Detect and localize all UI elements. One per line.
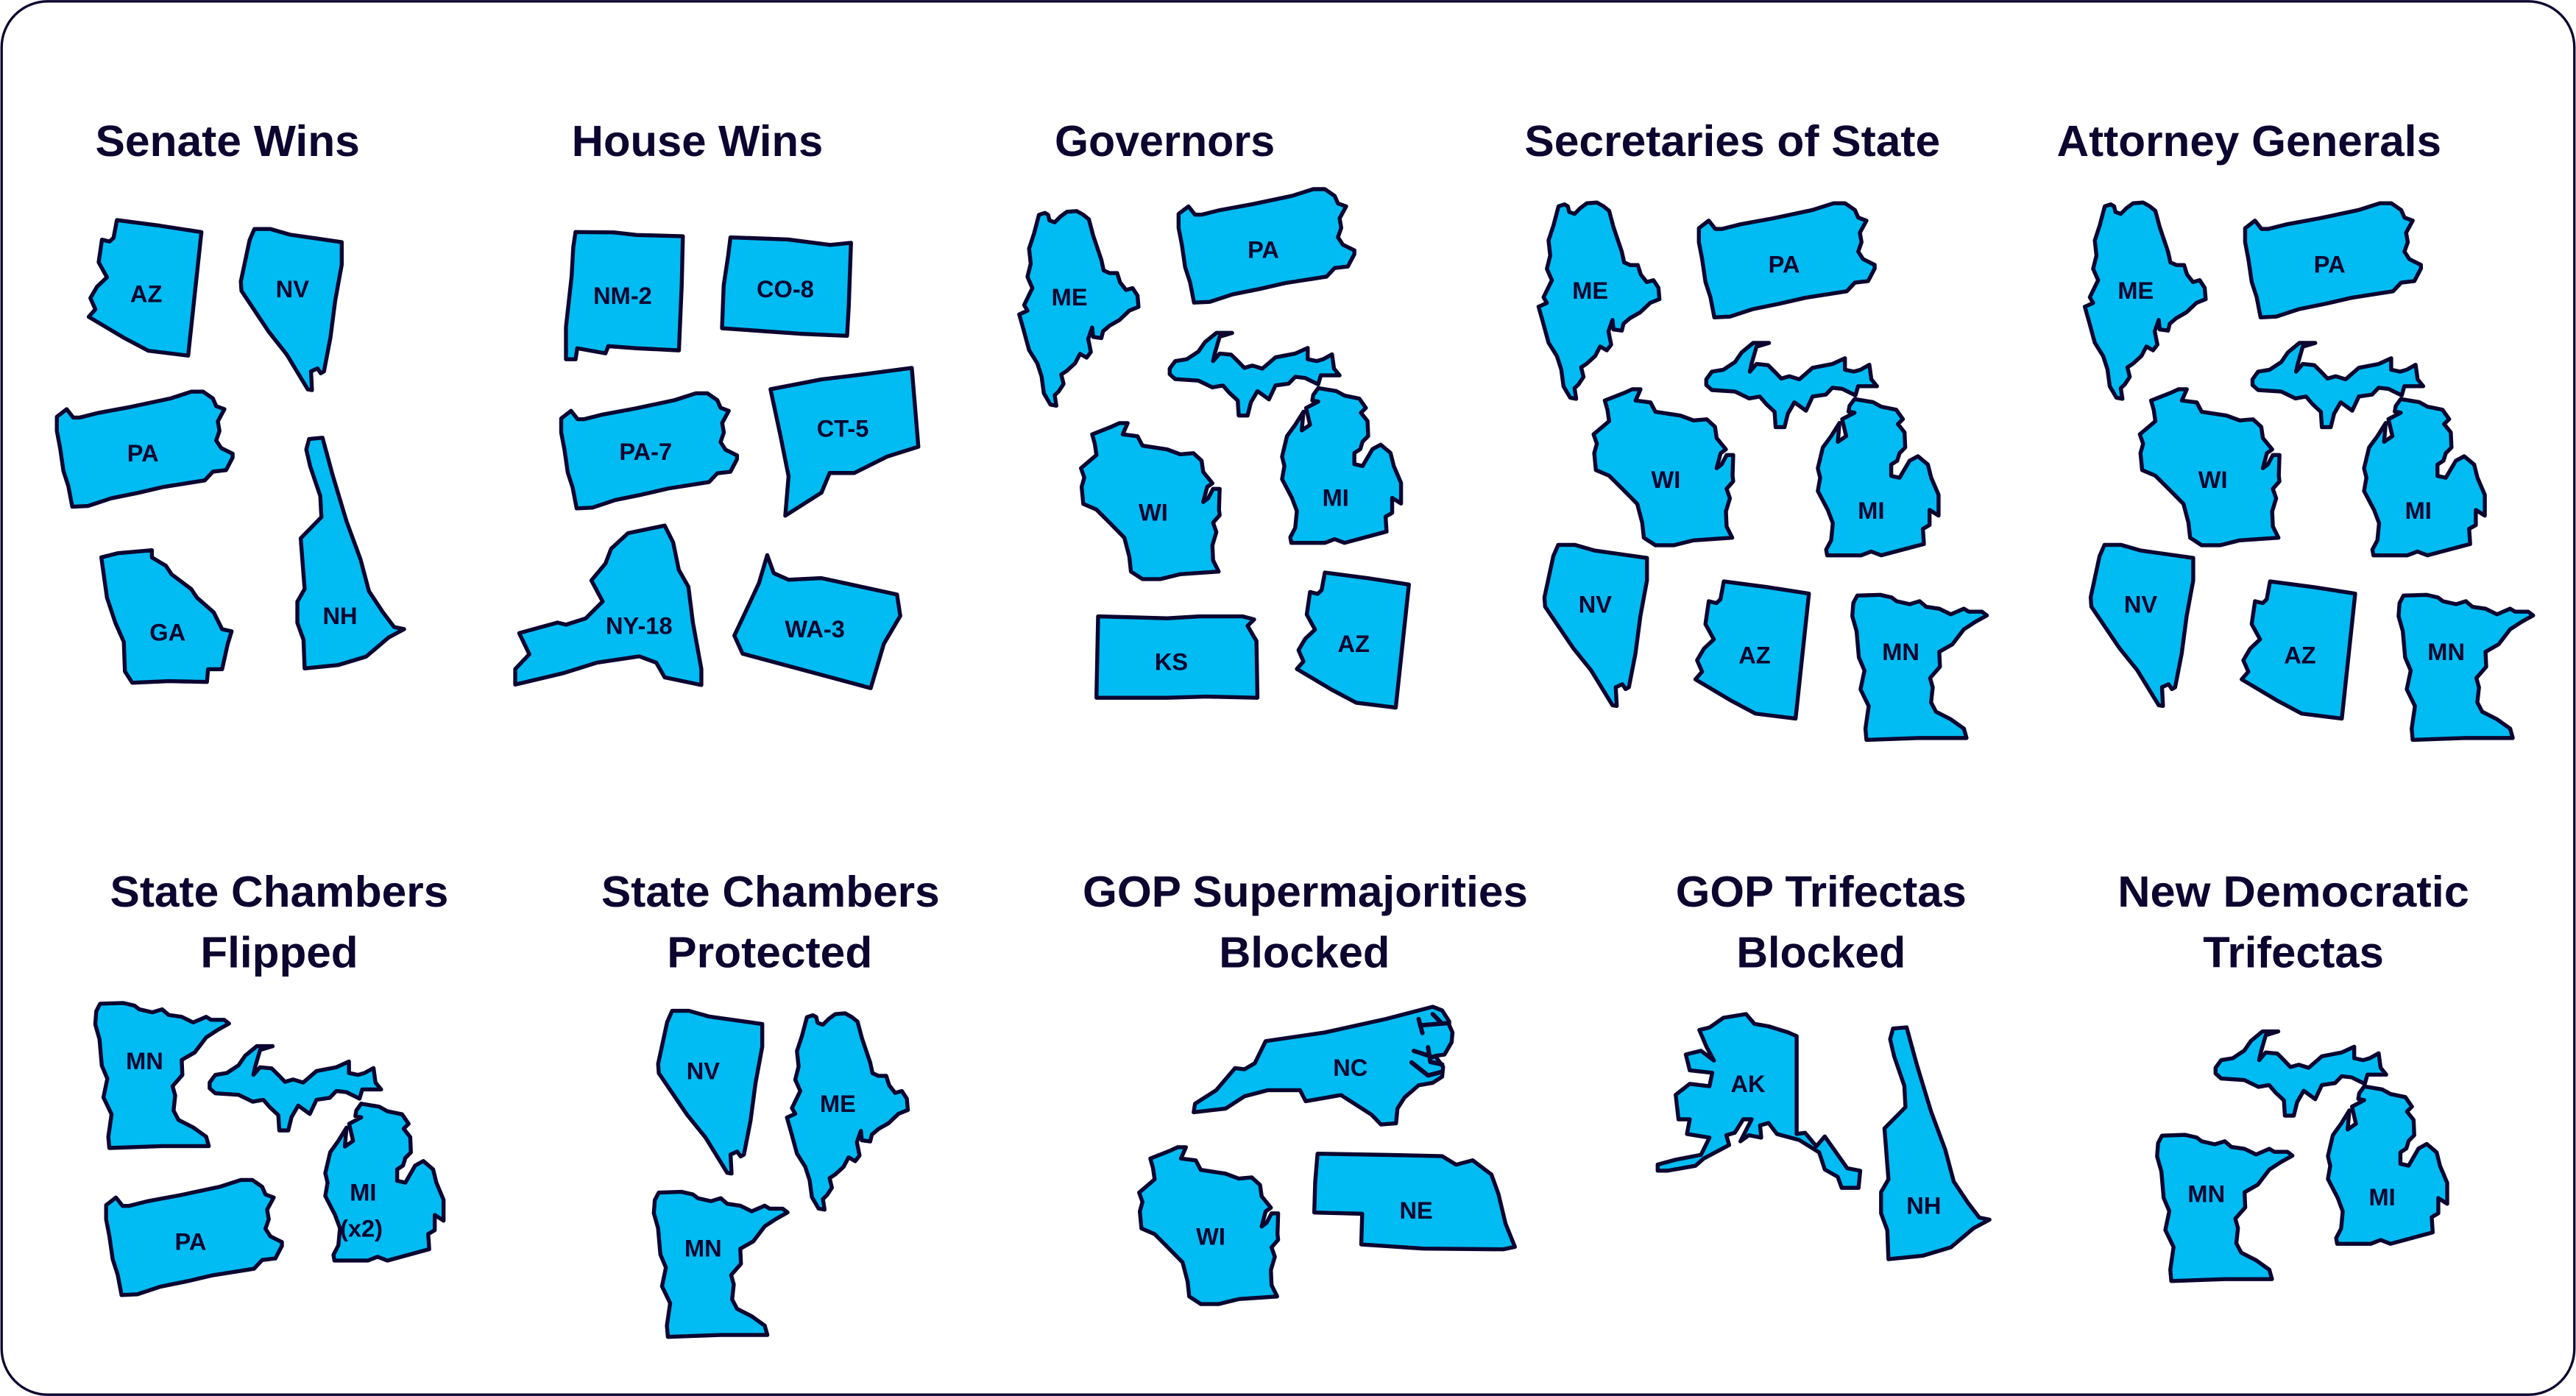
panel: Secretaries of State	[1524, 116, 1987, 740]
state: MN	[654, 1192, 788, 1337]
panel: New Democratic Trifectas	[2117, 867, 2469, 1281]
panel: State Chambers Flipped	[95, 867, 448, 1295]
state: ME: ME	[1572, 277, 1608, 304]
state: KS	[1097, 617, 1257, 698]
state: AZ: AZ	[2284, 642, 2316, 669]
state: NV	[2091, 545, 2193, 706]
panel: GOP Trifectas Blocked	[1657, 867, 1989, 1259]
state: MI	[2215, 1032, 2447, 1244]
state: ME	[1538, 202, 1660, 399]
state: ME: ME	[2117, 277, 2154, 304]
state: WI: WI	[2198, 467, 2228, 493]
state: PA	[2245, 203, 2421, 317]
district: CO-8	[722, 238, 851, 336]
state: WI: WI	[1196, 1224, 1225, 1250]
district: NM-2: NM-2	[593, 283, 652, 309]
state: GA	[102, 550, 232, 683]
district: CT-5	[771, 368, 919, 516]
heading: New Democratic Trifectas: Trifectas	[2203, 928, 2384, 977]
state: AZ	[2242, 581, 2355, 718]
state: PA: PA	[175, 1228, 206, 1255]
state: PA	[106, 1180, 282, 1295]
state: ME	[1019, 211, 1139, 405]
state: NV: NV	[2124, 591, 2157, 617]
state: NH: NH	[323, 603, 358, 629]
panel: House Wins	[515, 116, 919, 688]
state: WI: WI	[1651, 467, 1680, 493]
district: PA-7	[561, 393, 737, 509]
state: NV: NV	[276, 276, 309, 302]
state: NV	[1544, 545, 1647, 706]
state: GA: GA	[149, 619, 185, 645]
heading: State Chambers Flipped: Flipped	[200, 928, 358, 977]
state: PA: PA	[1769, 251, 1800, 277]
state: MN: MN	[1882, 639, 1919, 665]
state: AZ	[1696, 581, 1809, 718]
state: PA: PA	[2314, 251, 2346, 277]
state: AZ	[1297, 573, 1409, 708]
state: ME	[2085, 202, 2206, 399]
district: WA-3: WA-3	[785, 616, 845, 642]
state: KS: KS	[1155, 649, 1188, 676]
state: NE	[1314, 1154, 1515, 1250]
state: PA	[1699, 203, 1875, 317]
state: AZ	[89, 220, 202, 355]
state: MI: MI	[2369, 1184, 2396, 1211]
state: AZ: AZ	[130, 281, 162, 308]
state: NH	[1881, 1027, 1989, 1259]
heading: GOP Trifectas Blocked: Blocked	[1736, 928, 1906, 977]
state: WI	[2140, 389, 2279, 545]
state: NV: NV	[687, 1057, 720, 1084]
state: MI	[2252, 343, 2485, 556]
heading: Secretaries of State: Secretaries of State	[1524, 116, 1940, 166]
heading: State Chambers Protected	[601, 867, 940, 977]
state: AK: AK	[1730, 1071, 1766, 1097]
state: NV: NV	[1579, 591, 1612, 617]
state: NV	[241, 229, 342, 390]
state: PA	[1178, 189, 1354, 302]
heading: New Democratic Trifectas	[2117, 867, 2469, 977]
state: MI	[1170, 333, 1401, 543]
district: NY-18	[515, 525, 701, 685]
state: WI	[1081, 423, 1220, 579]
district: PA-7: PA-7	[619, 439, 672, 465]
heading: GOP Supermajorities Blocked	[1083, 867, 1528, 977]
heading: State Chambers Flipped	[110, 867, 448, 977]
state: PA: PA	[1248, 236, 1279, 263]
state: MI	[1706, 343, 1939, 556]
state: MI: MI	[1858, 497, 1885, 524]
heading: GOP Trifectas Blocked: GOP Trifectas	[1676, 867, 1967, 916]
state: ME: ME	[820, 1091, 856, 1117]
state: MN: MN	[126, 1048, 163, 1074]
heading: Governors: Governors	[1055, 116, 1275, 166]
district: WA-3	[735, 555, 900, 688]
panel: Attorney Generals	[2057, 116, 2533, 740]
state: MN: MN	[684, 1235, 722, 1261]
heading: State Chambers Protected: State Chambers	[601, 867, 940, 916]
state: NH: NH	[1906, 1192, 1941, 1219]
district: CO-8: CO-8	[757, 276, 814, 302]
state: MI (x2): MI	[350, 1179, 376, 1205]
state: MI (x2)	[210, 1046, 444, 1261]
state: NH	[297, 438, 404, 668]
state: MN: MN	[2427, 639, 2465, 665]
state: AZ: AZ	[1338, 631, 1370, 657]
district: CT-5: CT-5	[817, 416, 868, 442]
state: NV	[658, 1011, 762, 1174]
heading: GOP Trifectas Blocked	[1676, 867, 1967, 977]
state: PA: PA	[127, 440, 159, 467]
state: MN	[1853, 595, 1987, 740]
state: MN	[95, 1003, 229, 1148]
panel: State Chambers Protected	[601, 867, 940, 1337]
state: WI: WI	[1139, 499, 1168, 525]
state: ME	[787, 1013, 907, 1210]
heading: State Chambers Protected: Protected	[667, 928, 872, 977]
heading: GOP Supermajorities Blocked: Blocked	[1219, 928, 1390, 977]
panel: GOP Supermajorities Blocked	[1083, 867, 1528, 1304]
state: MI (x2): (x2)	[340, 1216, 383, 1242]
heading: New Democratic Trifectas: New Democratic	[2117, 867, 2469, 916]
district: NY-18: NY-18	[606, 612, 673, 639]
state: AK	[1657, 1014, 1860, 1188]
state: NC	[1194, 1007, 1453, 1124]
state: NE: NE	[1399, 1197, 1433, 1224]
heading: GOP Supermajorities Blocked: GOP Supermajorities	[1083, 867, 1528, 916]
state: MN: MN	[2187, 1181, 2225, 1208]
heading: Attorney Generals: Attorney Generals	[2057, 116, 2441, 166]
heading: State Chambers Flipped: State Chambers	[110, 867, 448, 916]
state: MN	[2399, 595, 2533, 740]
state: MI: MI	[1323, 484, 1349, 511]
state: PA	[57, 391, 233, 507]
heading: House Wins: House Wins	[572, 116, 823, 166]
district: NM-2	[566, 232, 683, 359]
state: WI	[1139, 1147, 1278, 1304]
panel: Governors	[1019, 116, 1409, 708]
state: MI: MI	[2405, 497, 2432, 524]
state: NC: NC	[1333, 1055, 1367, 1081]
panel: Senate Wins	[57, 116, 404, 683]
state: ME: ME	[1052, 284, 1088, 311]
state: MN	[2157, 1135, 2293, 1281]
state: WI	[1593, 389, 1733, 545]
state: AZ: AZ	[1738, 642, 1771, 669]
heading: Senate Wins: Senate Wins	[95, 116, 360, 166]
